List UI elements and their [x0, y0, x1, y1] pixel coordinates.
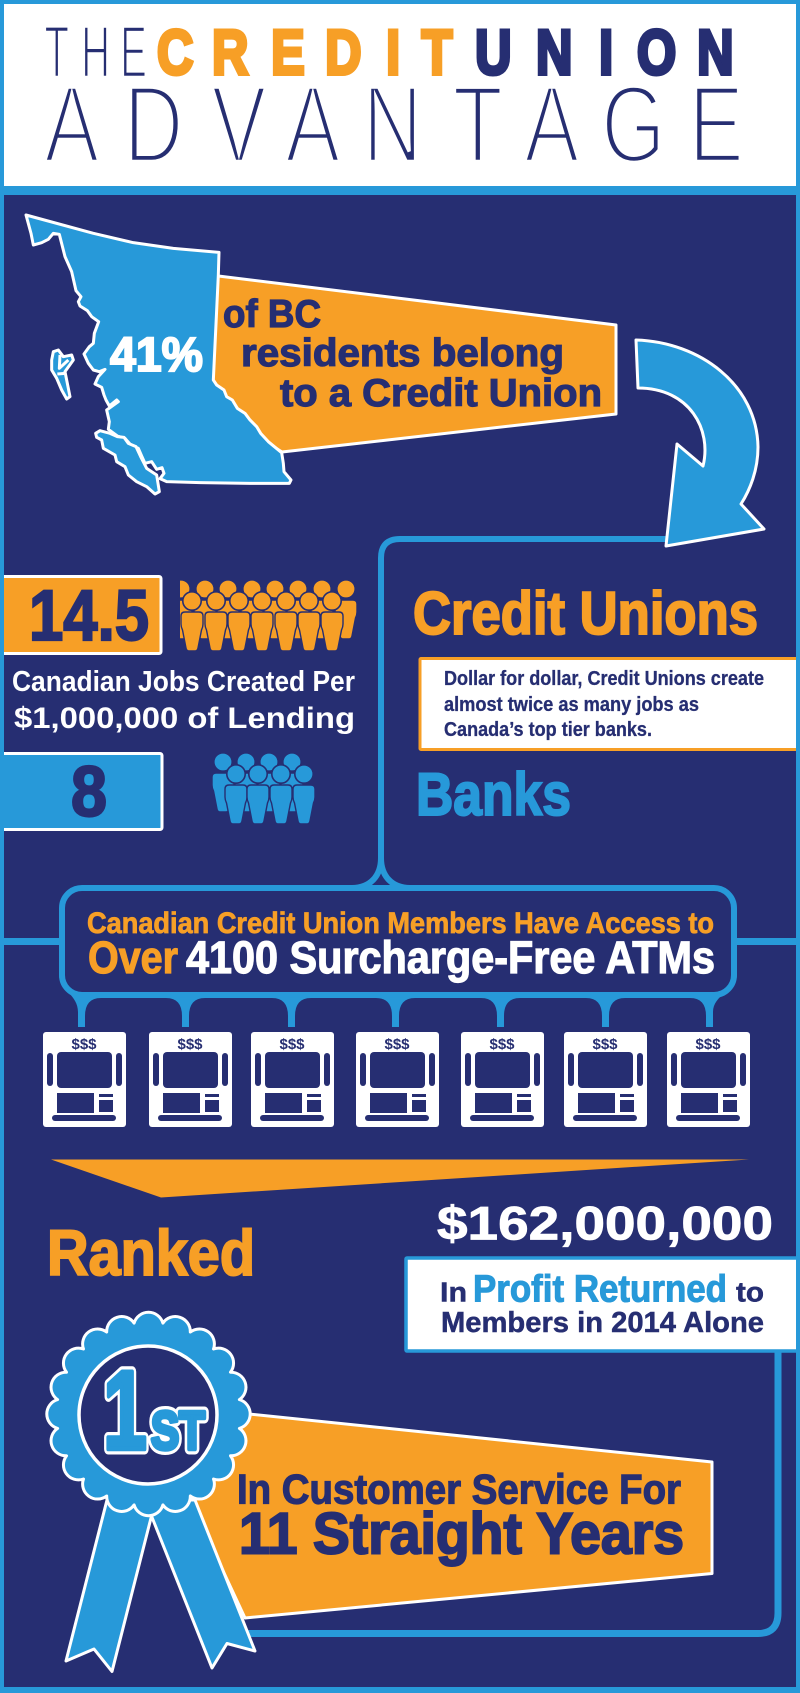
icon: ATM 6 [564, 1032, 647, 1127]
rank text: 1ST: ST [151, 1401, 205, 1461]
stat: 14.5 jobs box: 14.5 [29, 577, 149, 656]
icon: ATM 1 [43, 1032, 126, 1127]
title panel [4, 4, 796, 186]
callout: customer service orange banner [190, 1412, 712, 1618]
Haida Gwaii [52, 350, 73, 399]
heading: Ranked: Ranked [47, 1217, 255, 1289]
panel: profit returned box: In [440, 1276, 467, 1308]
panel: job comparison note: almost twice as many jobs as [444, 694, 699, 716]
panel: profit returned box: to [736, 1276, 764, 1308]
icon: ATM 1: $$$ [71, 1036, 97, 1053]
text: customer service [237, 1466, 684, 1566]
title word: THE: THE [45, 13, 147, 93]
panel: job comparison note: Dollar for dollar, Credit Unions create [444, 668, 764, 690]
ATM heading line 2: Over [88, 932, 178, 983]
callout: 41 percent orange banner [200, 274, 616, 452]
rank text outline: 1ST: 1 [103, 1348, 147, 1473]
icon: ribbon award [47, 1312, 255, 1672]
connectors from box to ATMs [59, 975, 737, 1027]
text: jobs created per lending: Canadian Jobs Created Per [12, 666, 355, 698]
map label: 41%: 41% [110, 329, 203, 382]
callout text: residents belong [241, 332, 564, 375]
icon: ATM 7 [667, 1032, 750, 1127]
text: jobs created per lending [12, 666, 355, 735]
title word: CREDIT: CREDIT [157, 18, 453, 88]
arrow: curved blue arrow [636, 340, 764, 546]
icon: orange group of people [170, 580, 357, 651]
icon: ATM 7: $$$ [695, 1036, 721, 1053]
stat: profit returned amount: $162,000,000 [437, 1196, 773, 1250]
icon: ATM 5 [461, 1032, 544, 1127]
icon: ATM 5: $$$ [489, 1036, 515, 1053]
panel: ATM access heading box [62, 888, 734, 995]
stat: 8 jobs box: 8 [71, 753, 107, 832]
text: jobs created per lending: $1,000,000 of Lending [14, 702, 355, 735]
panel: job comparison note: Canada’s top tier banks. [444, 719, 652, 741]
ATM heading line 1: Canadian Credit Union Members Have Access to [87, 907, 714, 940]
ribbon tails [66, 1500, 255, 1672]
heading: Banks: Banks [416, 761, 571, 828]
side lines beside ATM box [4, 938, 796, 945]
map: British Columbia [26, 215, 291, 494]
connector line: arrow to Credit Unions and down to ATM box [352, 539, 670, 888]
rank text outline: 1ST: ST [151, 1401, 205, 1461]
icon: ATM 4 [356, 1032, 439, 1127]
icon: ATM 4: $$$ [384, 1036, 410, 1053]
panel: profit returned box: Profit Returned [473, 1268, 727, 1310]
rosette centre [79, 1346, 217, 1484]
panel: profit returned box: Members in 2014 Alone [441, 1307, 764, 1339]
connector line: profit box to ribbon banner [240, 1350, 778, 1634]
panel: job comparison note [420, 658, 800, 750]
icon: ATM 3 [251, 1032, 334, 1127]
orange wedge divider [51, 1160, 749, 1198]
text: customer service: 11 Straight Years [239, 1502, 684, 1566]
icon: ATM 2: $$$ [177, 1036, 203, 1053]
heading: Credit Unions: Credit Unions [413, 580, 758, 647]
icon: ATM 2 [149, 1032, 232, 1127]
title [44, 13, 744, 186]
panel: profit returned box [406, 1258, 800, 1351]
icon: ATM 3: $$$ [279, 1036, 305, 1053]
callout text [223, 293, 602, 415]
stat: 8 jobs box [0, 753, 162, 832]
title word: ADVANTAGE: ADVANTAGE [44, 62, 744, 186]
Haida Gwaii inlets [57, 355, 68, 374]
Vancouver Island [96, 431, 159, 494]
text: customer service: In Customer Service For [237, 1466, 681, 1512]
title word: UNION: UNION [475, 18, 734, 88]
icon: blue group of people [212, 753, 315, 824]
callout text: to a Credit Union [280, 372, 602, 415]
callout text: of BC [223, 293, 321, 336]
rosette [47, 1312, 250, 1516]
ATM heading line 2: 4100 Surcharge-Free ATMs [186, 932, 715, 983]
icon: ATM 6: $$$ [592, 1036, 618, 1053]
rank text: 1ST: 1 [103, 1348, 147, 1473]
